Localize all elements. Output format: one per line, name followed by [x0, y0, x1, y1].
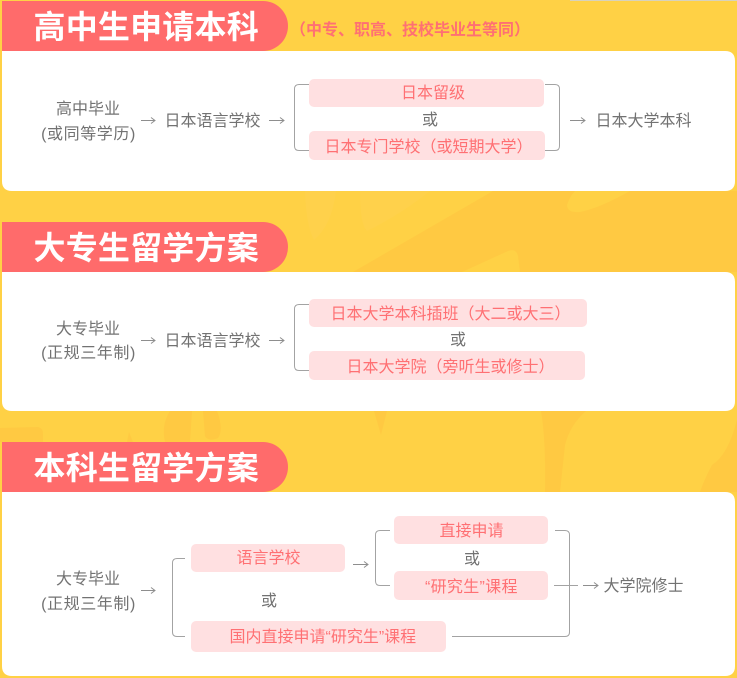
arrow [353, 562, 368, 568]
option: 大学院 [309, 351, 585, 380]
start: graduate: (正规三年制) [41, 595, 136, 613]
arrow [269, 338, 284, 344]
option: 国内直接申请 [191, 621, 446, 652]
option: 日本专门学校 [309, 131, 545, 160]
option: 语言学校: 语言学校 [236, 549, 301, 567]
arrow [141, 588, 155, 594]
card background [2, 492, 735, 676]
option: 本科插班: 日本大学本科插班（大二或大三） [330, 305, 571, 323]
start: graduate: 大专毕业 [56, 570, 120, 588]
language school: 日本语言学校 [164, 112, 261, 130]
or: 或 [422, 111, 438, 129]
or: 或 [261, 592, 277, 610]
heading banner [2, 222, 288, 272]
arrow [141, 338, 155, 344]
panel: 大专生留学方案 [2, 222, 735, 411]
start: junior college [41, 320, 136, 362]
arrow [583, 582, 598, 588]
arrow [141, 118, 155, 124]
subheading: （中专、职高、技校毕业生等同） [290, 20, 530, 39]
option: 日本留级: 日本留级 [401, 84, 465, 102]
arrow [570, 118, 585, 124]
option: 国内直接申请: 国内直接申请“研究生”课程 [230, 628, 416, 646]
or: 或 [450, 331, 466, 349]
right bracket [452, 530, 570, 636]
start: high school [41, 100, 136, 143]
start: high school: 高中毕业 [56, 100, 120, 118]
start: graduate [41, 570, 136, 613]
option: 日本专门学校: 日本专门学校（或短期大学） [324, 138, 533, 156]
card background [2, 272, 735, 411]
panel: 高中生申请本科 [2, 1, 735, 191]
option: 语言学校 [191, 544, 345, 572]
heading banner: 大专生留学方案 [34, 230, 259, 266]
connector [554, 584, 578, 586]
start: high school: (或同等学历) [41, 125, 136, 143]
panel: 本科生留学方案 [2, 442, 735, 676]
start: junior college: 大专毕业 [56, 320, 120, 338]
start: junior college: (正规三年制) [41, 344, 136, 362]
heading banner: 本科生留学方案 [34, 450, 259, 486]
left bracket [294, 84, 309, 150]
heading banner [2, 442, 288, 492]
language school: 日本语言学校 [164, 332, 261, 350]
result: 日本大学本科 [596, 112, 692, 130]
left bracket [172, 558, 185, 636]
left bracket [294, 304, 309, 370]
result: 大学院修士 [604, 577, 684, 595]
card background [2, 51, 735, 191]
option: 大学院: 日本大学院（旁听生或修士） [346, 358, 555, 376]
option: 直接申请 [394, 516, 548, 544]
arrow [269, 118, 284, 124]
option: 本科插班 [309, 299, 587, 327]
heading banner [2, 1, 288, 51]
option: 研究生课程: “研究生”课程 [425, 578, 518, 596]
right bracket [545, 84, 560, 150]
heading banner: 高中生申请本科 [34, 9, 259, 45]
or: 或 [464, 550, 480, 568]
inner bracket [376, 530, 390, 586]
option: 直接申请: 直接申请 [440, 522, 504, 540]
option: 研究生课程 [394, 571, 548, 600]
option: 日本留级 [309, 79, 544, 107]
